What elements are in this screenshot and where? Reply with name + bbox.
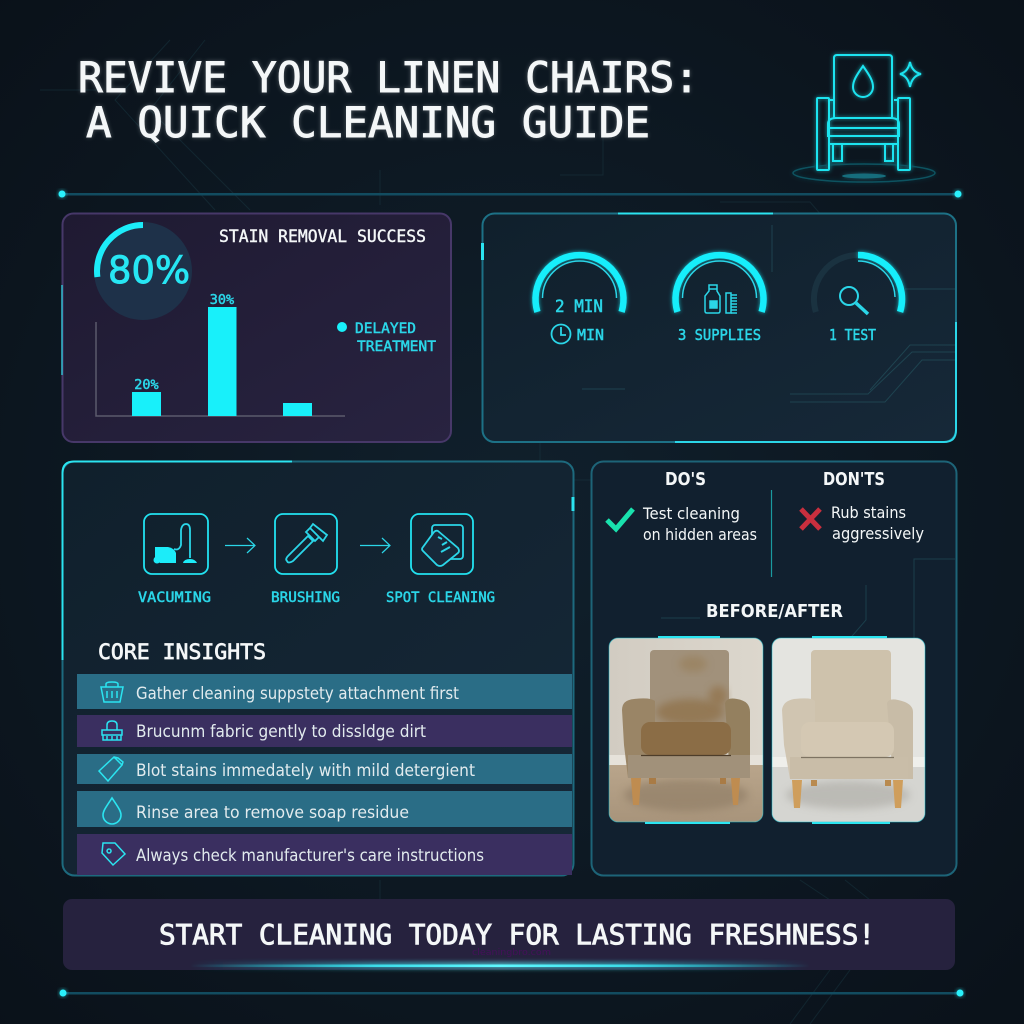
gauge: 1 test [814,255,902,344]
80% donut [94,222,192,320]
do's: on hidden areas [643,525,757,544]
legend: TREATMENT [357,339,436,355]
process step: spot cleaning: SPOT CLEANING [386,590,495,606]
title [78,53,699,147]
bottom divider [60,990,964,996]
bar chart: 20% [134,377,159,393]
icon: bottle and brush [705,285,737,313]
insight row 5: Always check manufacturer's care instructions [136,846,484,865]
gauge: 3 supplies: 3 SUPPLIES [678,326,761,344]
insight row 2: Brucunm fabric gently to dissldge dirt [136,722,426,741]
heading: core insights: CORE INSIGHTS [98,640,266,665]
gauge: 2 min: MIN [577,326,604,344]
80% donut: 80% [108,249,190,292]
legend: DELAYED [355,321,416,337]
process step: brushing [271,514,340,606]
process step: brushing: BRUSHING [271,590,340,606]
arrow [360,538,390,553]
banner: call to action [63,899,955,970]
bar chart: 30% [210,292,234,308]
do's: Test cleaning [642,504,740,523]
title: REVIVE YOUR LINEN CHAIRS: [78,53,699,102]
gauge: 2 min: 2 MIN [555,297,603,316]
panel: cleaning process and core insights [62,462,574,876]
process step: vacuuming: VACUMING [138,590,211,606]
panel: stain removal success [62,214,451,442]
don'ts: aggressively [832,524,924,543]
insight row 4: Rinse area to remove soap residue [136,803,409,822]
heading: before/after: BEFORE/AFTER [706,601,843,622]
do's: DO'S [665,469,706,490]
icon: chair with water drop [793,55,935,182]
panel heading: STAIN REMOVAL SUCCESS [219,227,426,246]
photo: after, clean chair [772,637,925,823]
icon: clock [552,324,570,344]
top divider [58,190,962,198]
panel: quick stats [482,214,956,442]
banner: call to action: START CLEANING TODAY FOR LASTING FRESHNESS! [159,918,875,951]
insight row 1: Gather cleaning suppstety attachment first [136,684,459,703]
panel: do's, don'ts, before and after [592,462,956,876]
insight row 4 [77,791,572,827]
banner: call to action: cleaningbro.com [472,948,551,958]
do's [607,469,757,544]
legend [337,321,436,355]
insight row 2 [77,715,572,747]
gauge: 1 test: 1 TEST [829,326,876,344]
insight row 5 [77,834,572,875]
icon: magnifier [840,287,868,314]
process step: vacuuming [138,514,211,606]
bar chart [96,292,345,416]
arrow [225,538,255,553]
don'ts: Rub stains [831,503,906,522]
don'ts: DON'TS [823,469,885,490]
insight row 1 [77,674,572,709]
gauge: 2 min [536,255,624,344]
process step: spot cleaning [386,514,495,606]
insight row 3: Blot stains immedately with mild detergient [136,761,475,780]
photo: before, stained chair [609,637,763,823]
insight row 3 [77,754,572,784]
gauge: 3 supplies [676,255,763,344]
title: A QUICK CLEANING GUIDE [86,98,650,147]
divider [770,490,772,577]
don'ts [801,469,924,543]
